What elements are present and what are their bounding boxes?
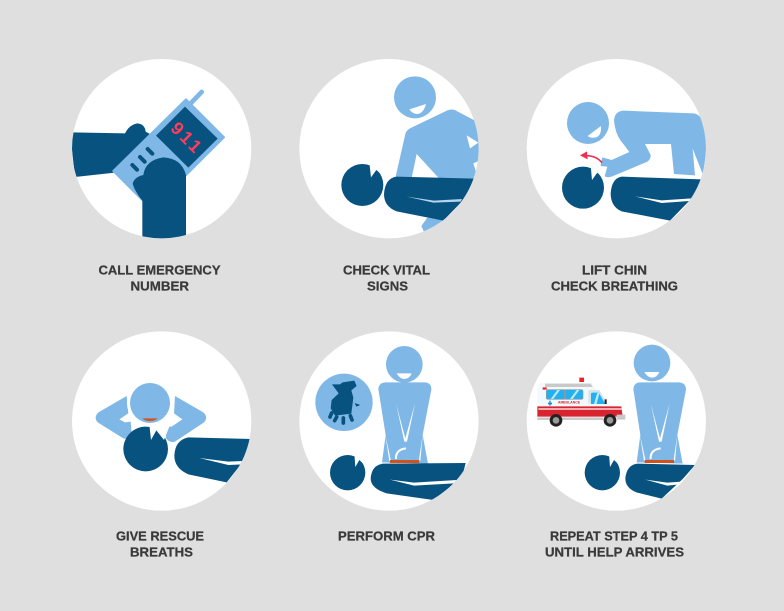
icon: rescuer body and arm	[601, 111, 706, 177]
icon: patient legs	[174, 437, 253, 482]
icon: patient legs	[611, 177, 702, 221]
icon: patient head	[330, 454, 369, 490]
heading: lift chin check breathing	[551, 263, 678, 294]
icon: thumb hand	[133, 157, 186, 240]
heading: give rescue breaths: BREATHS	[130, 545, 193, 560]
heading: lift chin check breathing: LIFT CHIN	[582, 263, 647, 278]
icon: patient head	[584, 455, 620, 490]
heading: give rescue breaths: GIVE RESCUE	[116, 529, 204, 544]
icon: hand placement inset	[315, 374, 373, 431]
icon: mobile phone	[113, 92, 224, 209]
icon: rescuer arms	[96, 396, 206, 442]
heading: call emergency number	[98, 263, 221, 294]
heading: give rescue breaths	[116, 529, 204, 560]
heading: call emergency number: CALL EMERGENCY	[98, 263, 221, 278]
icon: patient legs	[384, 177, 475, 221]
icon: rescuer	[378, 346, 431, 464]
arrow: lift chin	[580, 151, 602, 163]
icon: caller arm	[70, 123, 152, 177]
icon: rescuer head	[394, 76, 436, 118]
panel: call emergency number	[70, 59, 251, 240]
icon: rescuer head	[567, 102, 609, 144]
screen number 911: 911	[167, 118, 208, 159]
icon: ambulance: AMBULANCE	[558, 401, 581, 405]
icon: ambulance	[537, 378, 625, 427]
panel: check vital signs	[299, 59, 487, 238]
heading: repeat steps until help arrives: UNTIL HELP ARRIVES	[545, 545, 684, 560]
icon: patient head	[123, 424, 170, 471]
heading: repeat steps until help arrives: REPEAT STEP 4 TP 5	[550, 529, 678, 544]
icon: rescuer head	[130, 383, 170, 423]
icon: patient head	[562, 165, 607, 209]
panel: lift chin check breathing	[527, 59, 706, 238]
panel: perform cpr	[299, 331, 479, 511]
heading: call emergency number: NUMBER	[130, 279, 190, 294]
icon: rescuer torso	[395, 110, 487, 181]
icon: patient head	[341, 163, 387, 206]
icon: rescuer lower leg	[421, 218, 444, 232]
heading: check vital signs: CHECK VITAL	[343, 263, 430, 278]
panel: repeat steps until help arrives	[527, 331, 706, 511]
heading: perform cpr: PERFORM CPR	[338, 529, 436, 544]
icon: patient legs	[625, 464, 695, 499]
heading: lift chin check breathing: CHECK BREATHING	[551, 279, 678, 294]
icon: patient legs	[371, 463, 466, 500]
heading: repeat steps until help arrives	[545, 529, 684, 560]
heading: check vital signs: SIGNS	[367, 279, 408, 294]
panel: give rescue breaths	[72, 331, 253, 511]
icon: rescuer	[633, 345, 686, 464]
heading: check vital signs	[343, 263, 430, 294]
